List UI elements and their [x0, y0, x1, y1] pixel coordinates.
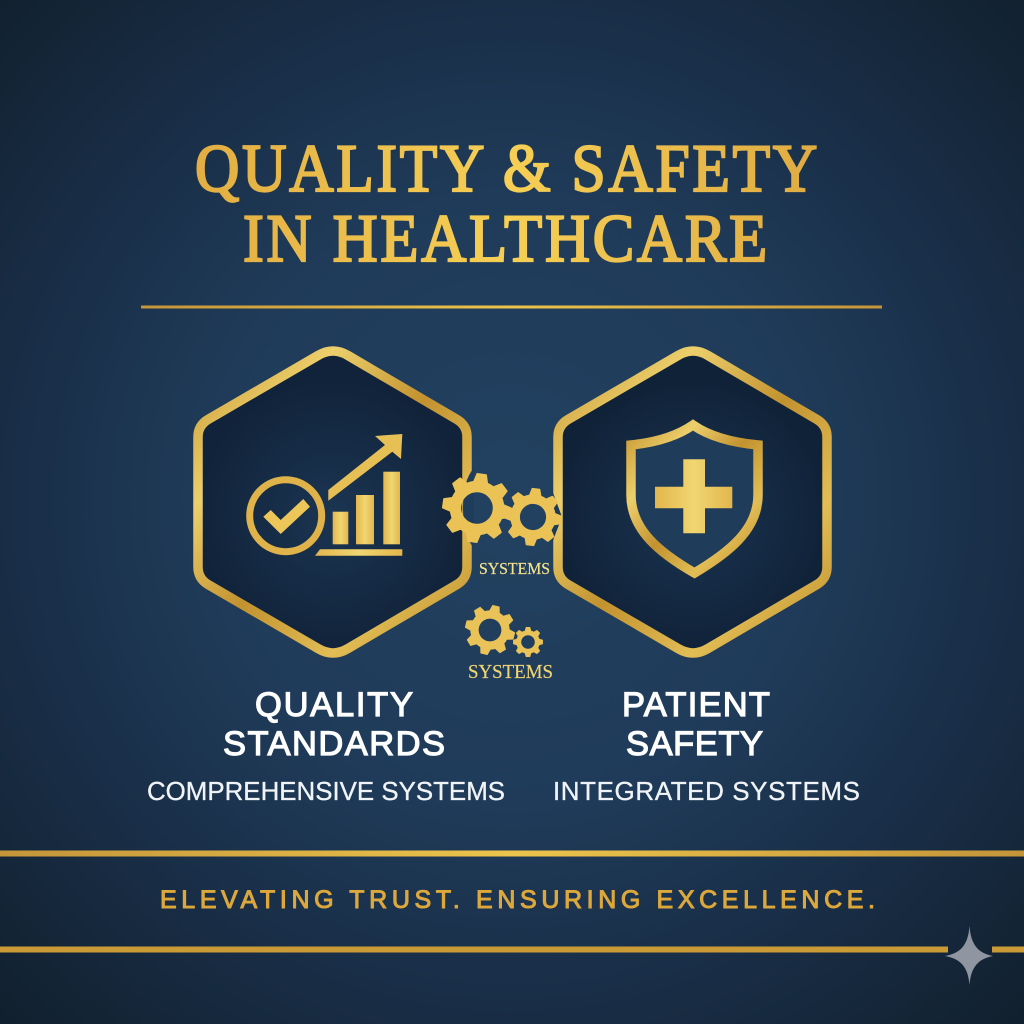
- text block: quality standards: [147, 686, 505, 806]
- icon: connected gears between hexagons: [439, 468, 564, 548]
- title: QUALITY & SAFETY: [195, 130, 820, 206]
- title rule: [141, 306, 882, 308]
- label: systems lower: SYSTEMS: [468, 662, 553, 683]
- text block: quality standards: COMPREHENSIVE SYSTEMS: [147, 776, 505, 806]
- footer bottom rule: [0, 946, 1024, 952]
- text block: patient safety: INTEGRATED SYSTEMS: [553, 776, 860, 806]
- text block: patient safety: [553, 686, 860, 806]
- label: systems upper: SYSTEMS: [479, 559, 550, 578]
- title: IN HEALTHCARE: [243, 200, 770, 276]
- text block: patient safety: PATIENT: [622, 686, 770, 724]
- icon: rising bar chart with arrow: [315, 434, 402, 556]
- text block: patient safety: SAFETY: [626, 725, 763, 763]
- title: [195, 130, 820, 276]
- icon: checkmark in circle: [250, 480, 322, 552]
- panel: patient safety hexagon: [558, 351, 827, 653]
- tagline: ELEVATING TRUST. ENSURING EXCELLENCE.: [160, 886, 875, 914]
- footer top rule: [0, 850, 1024, 856]
- icon: small gears: [460, 600, 543, 660]
- icon: shield with medical cross: [631, 425, 758, 573]
- icon: four-point star: [945, 926, 993, 985]
- text block: quality standards: QUALITY: [255, 686, 413, 724]
- panel: quality standards hexagon: [198, 351, 467, 653]
- text block: quality standards: STANDARDS: [223, 725, 445, 763]
